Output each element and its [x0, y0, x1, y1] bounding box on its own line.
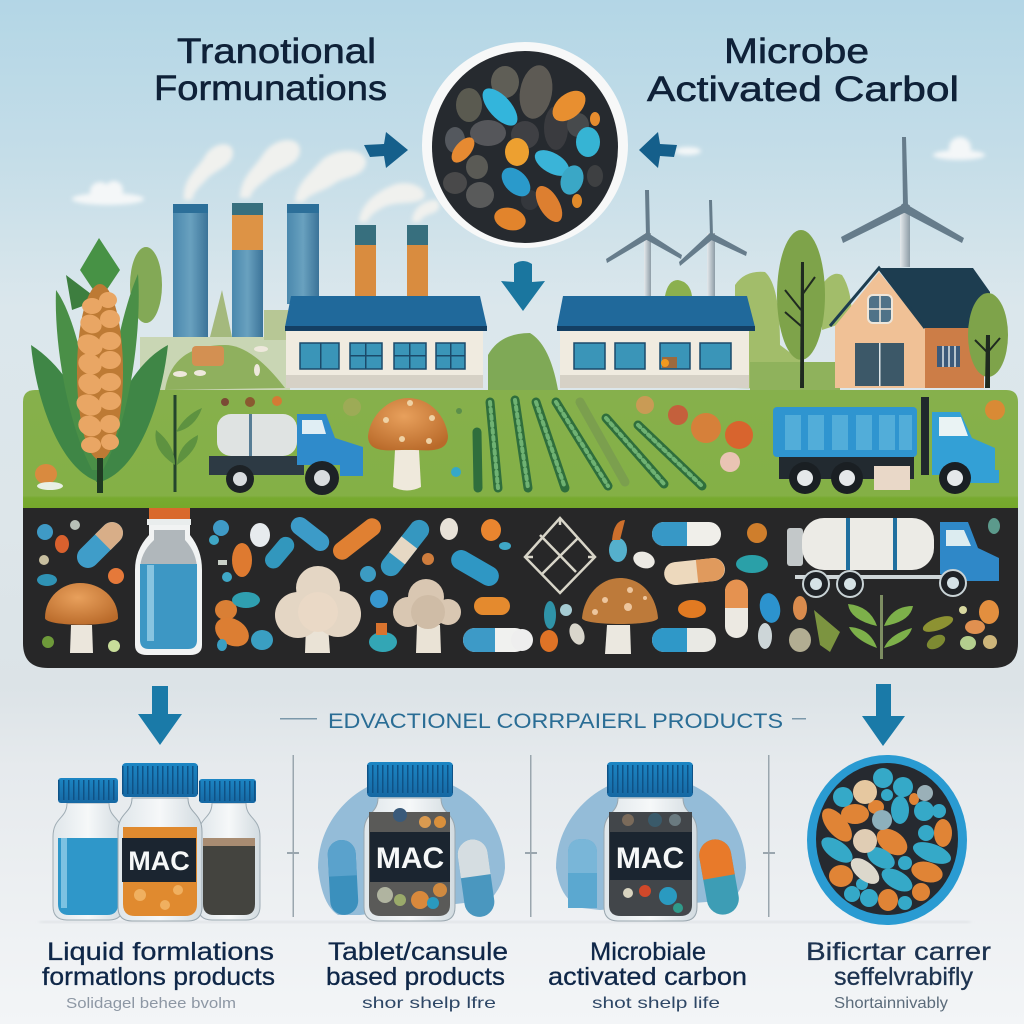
caption: microbial carbon: Microbiale — [590, 938, 706, 966]
caption: tablet capsule: shor shelp lfre — [362, 995, 496, 1012]
title: traditional formulations: Formunations — [154, 69, 387, 108]
small seeds and microbes right — [789, 596, 999, 652]
smoke plumes — [184, 140, 439, 222]
bottle: liquid — [135, 508, 202, 655]
house — [830, 268, 990, 388]
title: microbe activated carbon — [647, 32, 959, 109]
bottle group: microbial activated carbon — [556, 762, 746, 921]
icon: carbon lattice net — [525, 518, 595, 593]
panel: dark soil with microbes and capsules — [23, 508, 1018, 668]
caption: tablet capsule — [326, 938, 508, 1012]
mushroom: spotted right — [582, 578, 658, 654]
title: microbe activated carbon: Microbe — [724, 32, 869, 71]
caption: liquid formulations: formatlons products — [42, 963, 275, 991]
dish: bifidus carrier — [807, 755, 967, 925]
arrow: right into circle — [639, 132, 677, 168]
caption: tablet capsule: Tablet/cansule — [328, 938, 508, 966]
arrow: down left — [138, 686, 182, 745]
caption: liquid formulations: Liquid formlations — [47, 938, 274, 966]
arrow: down right — [862, 684, 905, 746]
clouds — [72, 137, 985, 205]
factory: left — [285, 296, 487, 388]
panel: field — [23, 390, 1018, 510]
bottle group: liquid formulations: MAC — [128, 846, 190, 876]
caption: bifidus carrier: Shortainnivably — [834, 995, 948, 1012]
pills group: right centre — [511, 520, 783, 652]
central circle of carbon and microbes — [422, 42, 628, 248]
bottle group: microbial activated carbon: MAC — [616, 842, 684, 875]
chimneys — [173, 203, 428, 337]
background hills and trees — [130, 247, 852, 390]
dump truck — [773, 397, 999, 494]
plant sprout — [848, 595, 913, 659]
title: traditional formulations: Tranotional — [177, 32, 376, 71]
icon: wind turbines — [606, 137, 964, 296]
field debris: orange produce — [636, 396, 1005, 472]
caption: liquid formulations — [42, 938, 275, 1012]
caption: tablet capsule: based products — [326, 963, 505, 991]
caption: microbial carbon — [548, 938, 747, 1012]
title: traditional formulations — [154, 32, 387, 108]
bottle group: tablet capsule — [318, 762, 505, 921]
arrow: left into circle — [364, 132, 408, 168]
field specks — [35, 396, 462, 490]
tanker truck in soil — [787, 518, 1000, 597]
small tree in field — [155, 395, 202, 492]
microbe blobs orange and teal — [210, 592, 397, 652]
caption: microbial carbon: activated carbon — [548, 963, 747, 991]
factory: right — [557, 296, 755, 388]
mushroom cluster: white one — [275, 566, 361, 653]
caption: bifidus carrier: Bificrtar carrer — [806, 938, 991, 966]
capsules: centre column — [447, 546, 527, 652]
tree: tall — [777, 230, 825, 388]
caption: bifidus carrier — [806, 938, 991, 1012]
caption: microbial carbon: shot shelp life — [592, 995, 720, 1012]
crop rows — [477, 400, 702, 488]
mushroom: orange left — [45, 583, 118, 653]
caption: bifidus carrier: seffelvrabifly — [834, 963, 973, 991]
mushroom cluster: white two — [393, 579, 461, 653]
tanker truck on field — [209, 414, 363, 495]
dividers — [287, 755, 775, 917]
corn plant — [31, 238, 168, 493]
arrow: down from circle — [501, 261, 545, 311]
capsule: blue tan — [72, 517, 128, 573]
section heading: EDVACTIONEL CORRPAIERL PRODUCTS — [328, 710, 783, 733]
small microbes left — [37, 520, 124, 652]
pills group: middle left — [209, 513, 511, 608]
bottle group: tablet capsule: MAC — [376, 842, 444, 875]
title: microbe activated carbon: Activated Carbol — [647, 70, 959, 109]
ground shadow — [40, 921, 970, 923]
bottle group: liquid formulations — [53, 763, 260, 921]
mushroom on field — [368, 398, 448, 490]
caption: liquid formulations: Solidagel behee bvolm — [66, 995, 236, 1012]
tree: small right — [968, 293, 1008, 388]
